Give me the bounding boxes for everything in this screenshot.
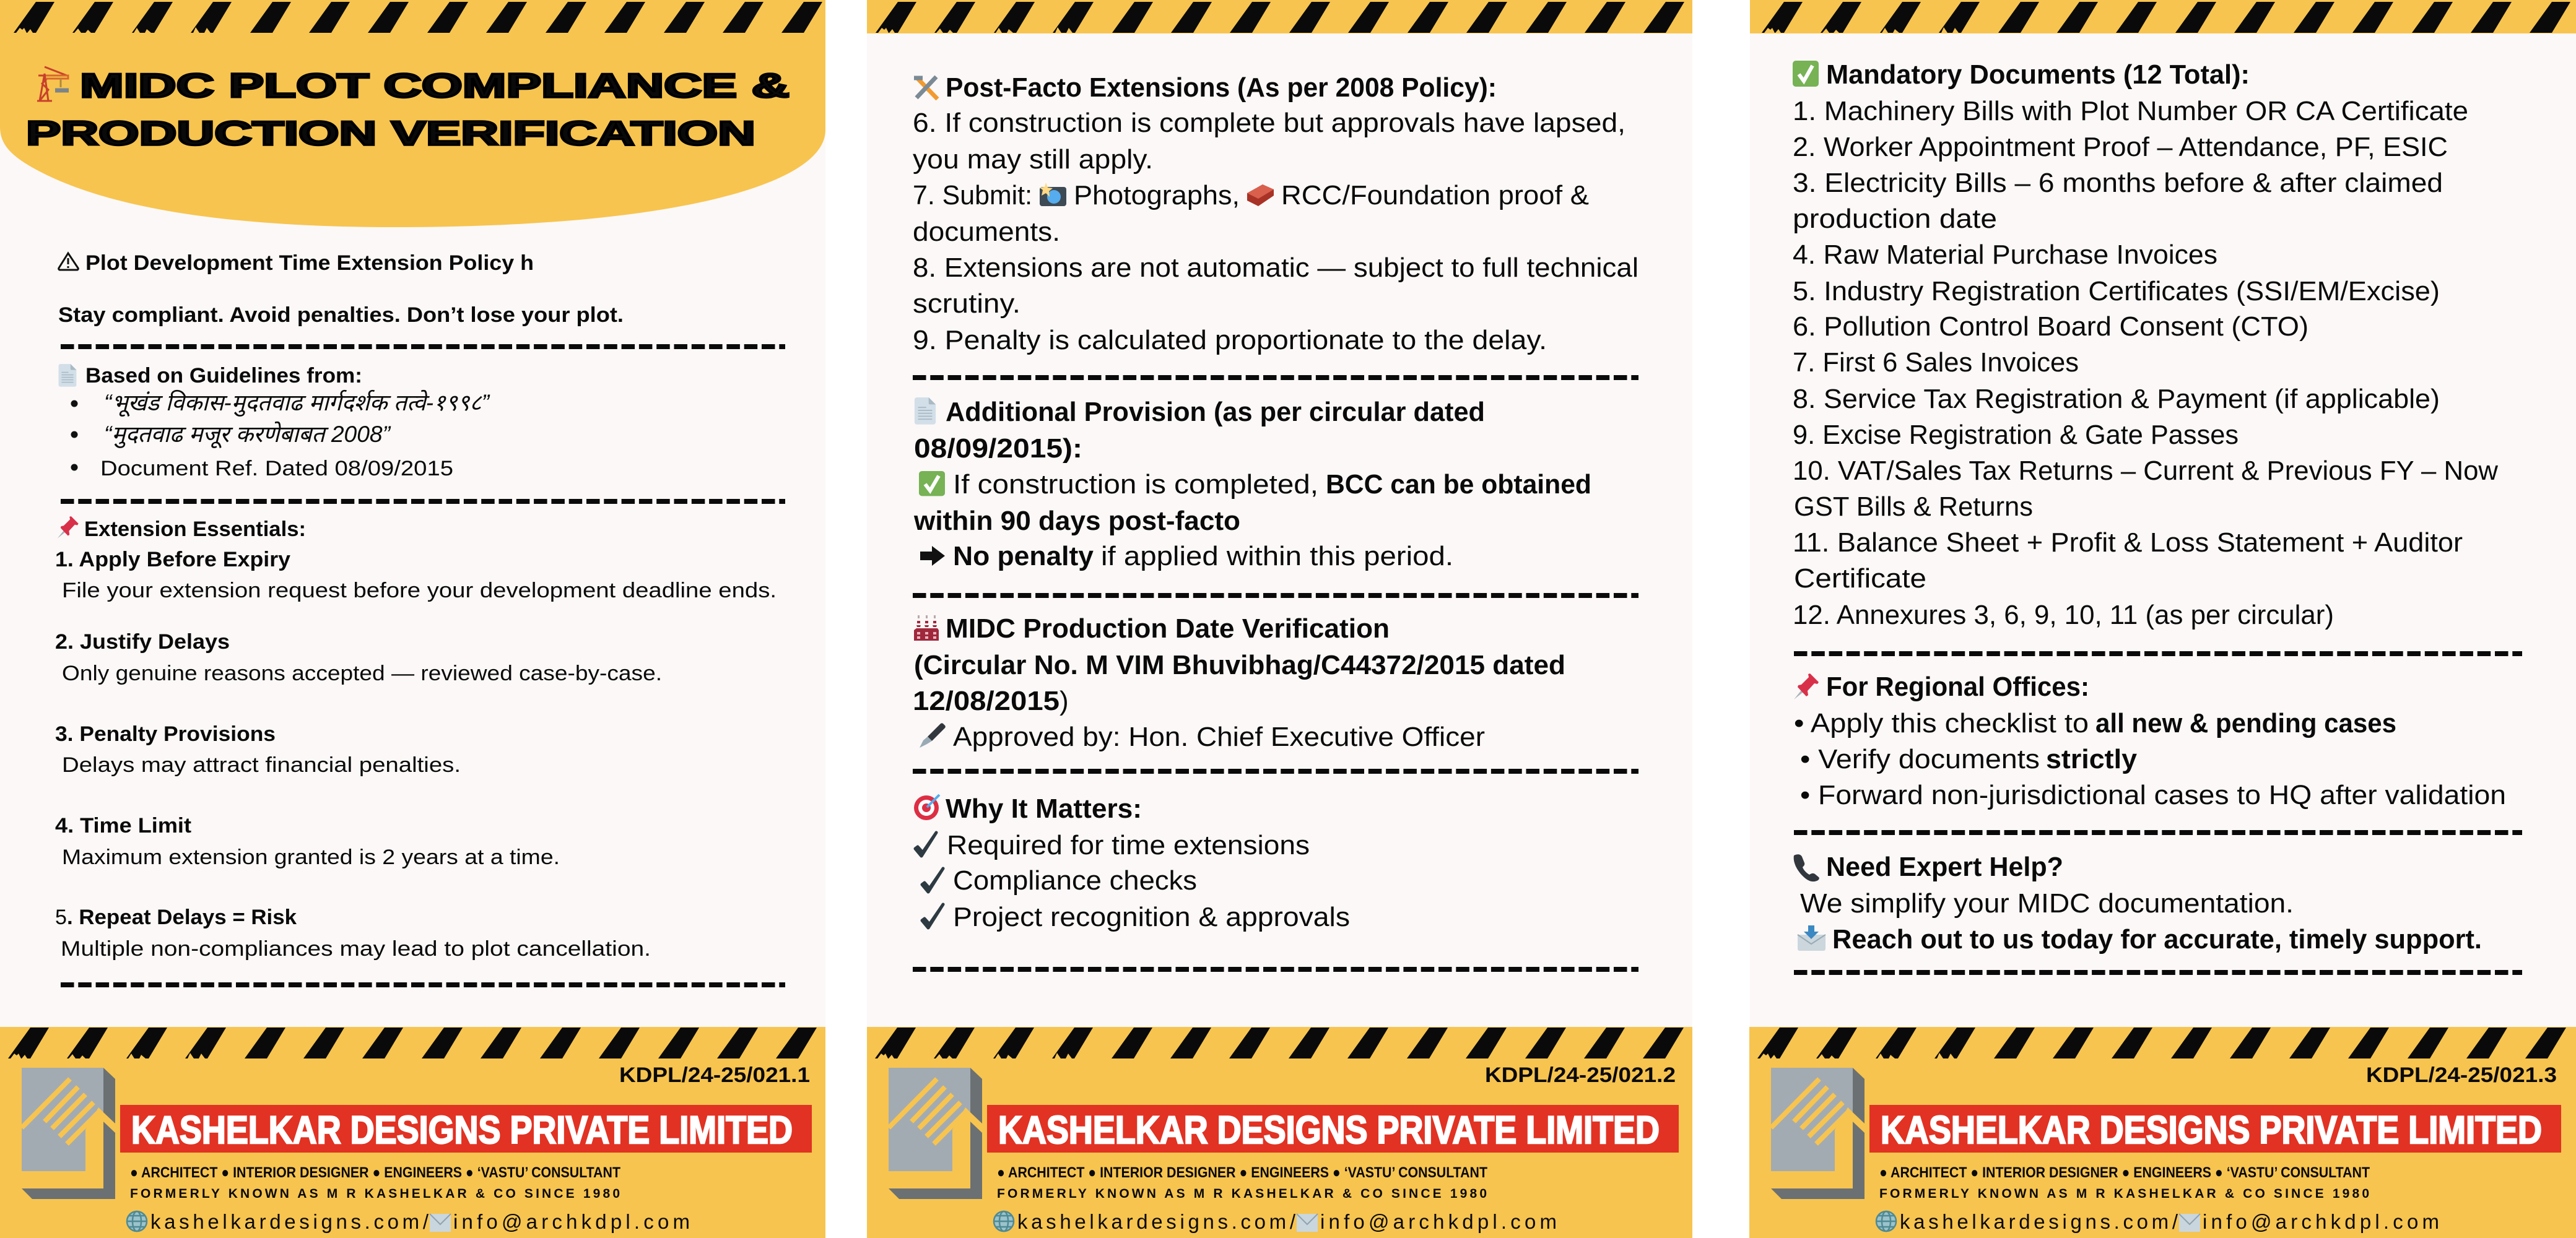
- section: regional offices: all new & pending cases: [2095, 708, 2396, 738]
- section: extension essentials: 4. Time Limit: [55, 814, 191, 838]
- panel: post-facto, provision, verification: [867, 0, 1692, 1052]
- section: production date verification: Approved by: Hon. Chief Executive Officer: [953, 722, 1485, 752]
- section: extension essentials: Multiple non-compliances may lead to plot cancellation.: [61, 937, 651, 961]
- email: info@archkdpl.com: [2203, 1210, 2439, 1233]
- icon: fountain pen: [920, 723, 946, 748]
- section: post-facto extensions: 6. If construction is complete but approvals have lapsed,: [913, 108, 1625, 138]
- section: mandatory documents list: 9. Excise Registration & Gate Passes: [1793, 420, 2239, 450]
- intro tagline: Stay compliant. Avoid penalties. Don’t lose your plot.: [58, 303, 624, 327]
- section: extension essentials: Delays may attract financial penalties.: [62, 753, 461, 777]
- reference code: KDPL/24-25/021.1: [619, 1063, 810, 1087]
- section: mandatory documents list: 11. Balance Sheet + Profit & Loss Statement + Auditor: [1793, 527, 2463, 558]
- section: mandatory documents list: 10. VAT/Sales Tax Returns – Current & Previous FY – Now: [1793, 456, 2498, 486]
- section: extension essentials: Extension Essentials:: [84, 517, 306, 541]
- icon: globe: [127, 1211, 147, 1231]
- section: extension essentials: . Repeat Delays = Risk: [67, 906, 297, 929]
- logo: [22, 1068, 115, 1199]
- website: kashelkardesigns.com/: [1900, 1210, 2178, 1233]
- section: post-facto extensions: documents.: [913, 217, 1060, 247]
- section: post-facto extensions: scrutiny.: [913, 288, 1020, 319]
- section: why it matters: Compliance checks: [953, 865, 1197, 896]
- section: production date verification: MIDC Production Date Verification: [946, 613, 1390, 644]
- reference code: KDPL/24-25/021.2: [1485, 1063, 1676, 1087]
- section: post-facto extensions: you may still apply.: [913, 144, 1153, 175]
- section: post-facto extensions: RCC/Foundation proof &: [1281, 180, 1589, 210]
- footer: company block 3: [1749, 1027, 2576, 1238]
- section: regional offices: • Forward non-jurisdictional cases to HQ after validation: [1800, 780, 2506, 810]
- section: additional provision: 08/09/2015):: [914, 433, 1082, 464]
- company name banner: KASHELKAR DESIGNS PRIVATE LIMITED: [131, 1109, 793, 1152]
- icon: document: [59, 364, 76, 387]
- section: additional provision: BCC can be obtained: [1326, 469, 1591, 500]
- intro heading: Plot Development Time Extension Policy h: [85, 251, 534, 275]
- section: mandatory documents list: GST Bills & Returns: [1794, 491, 2033, 522]
- section: extension essentials: 2. Justify Delays: [55, 630, 230, 654]
- section: post-facto extensions: 9. Penalty is calculated proportionate to the delay.: [913, 325, 1547, 355]
- section: why it matters: Project recognition & approvals: [953, 902, 1350, 932]
- section: mandatory documents list: 12. Annexures 3, 6, 9, 10, 11 (as per circular): [1793, 600, 2334, 630]
- section: mandatory documents list: 8. Service Tax Registration & Payment (if applicable): [1793, 384, 2440, 414]
- section: mandatory documents list: Mandatory Documents (12 Total):: [1826, 59, 2250, 90]
- section: production date verification: (Circular No. M VIM Bhuvibhag/C44372/2015 dated: [914, 650, 1565, 680]
- header: yellow curved title band: [0, 0, 825, 227]
- hazard stripes: top: [14, 2, 822, 33]
- section: mandatory documents list: 5. Industry Registration Certificates (SSI/EM/Excise): [1793, 276, 2440, 306]
- section: additional provision: If construction is completed,: [953, 469, 1318, 500]
- icon: check box: [1793, 61, 1819, 87]
- section: extension essentials: Only genuine reasons accepted — reviewed case-by-case.: [62, 662, 662, 685]
- section: mandatory documents list: [1793, 59, 2498, 630]
- icon: check box: [919, 471, 945, 496]
- formerly line: FORMERLY KNOWN AS M R KASHELKAR & CO SINCE 1980: [130, 1187, 620, 1201]
- section: expert help: Reach out to us today for accurate, timely support.: [1832, 924, 2482, 954]
- section: guidelines: [59, 364, 490, 480]
- icon: globe: [1876, 1211, 1896, 1231]
- icon: envelope: [2179, 1214, 2200, 1232]
- section: mandatory documents list: 3. Electricity Bills – 6 months before & after claimed: [1793, 168, 2443, 198]
- section: regional offices: • Apply this checklist to: [1794, 708, 2089, 738]
- section: regional offices: For Regional Offices:: [1826, 672, 2089, 702]
- section: post-facto extensions: Post-Facto Extensions (As per 2008 Policy):: [946, 72, 1497, 103]
- icon: camera flash: [1040, 183, 1066, 206]
- section: additional provision: No penalty: [953, 541, 1094, 571]
- section: production date verification: ): [1060, 686, 1069, 716]
- hazard stripes band: [1750, 0, 2576, 33]
- section: extension essentials: 5: [55, 906, 67, 929]
- section: extension essentials: 1. Apply Before Expiry: [55, 548, 290, 571]
- icon: envelope: [1297, 1214, 1318, 1232]
- section: extension essentials: File your extension request before your development deadline ends.: [62, 579, 777, 602]
- reference code: KDPL/24-25/021.3: [2366, 1063, 2557, 1087]
- logo: [1771, 1068, 1865, 1199]
- icon: factory: [914, 615, 939, 641]
- section: mandatory documents list: 7. First 6 Sales Invoices: [1793, 347, 2079, 378]
- website: kashelkardesigns.com/: [150, 1210, 429, 1233]
- section: regional offices: • Verify documents: [1800, 744, 2040, 774]
- section: additional provision: Additional Provision (as per circular dated: [946, 397, 1485, 427]
- services line: ● ARCHITECT ● INTERIOR DESIGNER ● ENGINEERS ● ‘VASTU’ CONSULTANT: [130, 1164, 620, 1181]
- section: guidelines: “मुदतवाढ मजूर करणेबाबत 2008”: [104, 421, 391, 449]
- section: expert help: Need Expert Help?: [1826, 852, 2063, 882]
- hazard stripes band: [867, 0, 1692, 33]
- icon: tick: [922, 904, 943, 928]
- section: why it matters: [914, 794, 1350, 932]
- icon: crane: [37, 67, 69, 101]
- footer: company block 2: [867, 1027, 1692, 1238]
- icon: document: [915, 397, 936, 425]
- section: guidelines: Document Ref. Dated 08/09/2015: [100, 457, 453, 480]
- logo: [889, 1068, 982, 1199]
- section: why it matters: Required for time extensions: [947, 830, 1310, 860]
- section: expert help: [1794, 852, 2482, 954]
- section: mandatory documents list: Certificate: [1794, 563, 1926, 594]
- section: post-facto extensions: [913, 72, 1638, 355]
- section: mandatory documents list: production date: [1793, 204, 1997, 234]
- title: PRODUCTION VERIFICATION: [26, 114, 755, 152]
- icon: globe: [994, 1211, 1014, 1231]
- website: kashelkardesigns.com/: [1017, 1210, 1296, 1233]
- email: info@archkdpl.com: [453, 1210, 690, 1233]
- section: regional offices: [1794, 672, 2506, 810]
- icon: warning: [59, 253, 78, 270]
- title: [26, 66, 790, 152]
- section: guidelines: Based on Guidelines from:: [85, 364, 362, 387]
- icon: target: [914, 795, 939, 820]
- section: expert help: We simplify your MIDC documentation.: [1800, 888, 2294, 919]
- icon: tick: [915, 833, 936, 856]
- icon: arrow: [920, 546, 945, 566]
- icon: pushpin: [58, 516, 79, 539]
- section: post-facto extensions: 8. Extensions are not automatic — subject to full technical: [913, 253, 1638, 283]
- email: info@archkdpl.com: [1320, 1210, 1557, 1233]
- section: extension essentials: [55, 516, 777, 961]
- icon: envelope: [430, 1214, 451, 1232]
- section: mandatory documents list: 4. Raw Material Purchase Invoices: [1793, 240, 2217, 270]
- icon: brick: [1247, 184, 1274, 206]
- services line: ● ARCHITECT ● INTERIOR DESIGNER ● ENGINEERS ● ‘VASTU’ CONSULTANT: [1879, 1164, 2370, 1181]
- section: why it matters: Why It Matters:: [946, 794, 1142, 824]
- section: production date verification: [913, 613, 1565, 752]
- section: mandatory documents list: 6. Pollution Control Board Consent (CTO): [1793, 311, 2308, 342]
- section: post-facto extensions: 7. Submit:: [913, 180, 1032, 210]
- section: mandatory documents list: 1. Machinery Bills with Plot Number OR CA Certificate: [1793, 96, 2468, 126]
- formerly line: FORMERLY KNOWN AS M R KASHELKAR & CO SINCE 1980: [997, 1187, 1487, 1201]
- section: additional provision: [913, 397, 1591, 571]
- icon: tick: [922, 868, 943, 892]
- section: production date verification: 12/08/2015: [913, 686, 1060, 716]
- icon: inbox envelope: [1798, 925, 1825, 951]
- icon: pushpin: [1794, 673, 1819, 699]
- title: MIDC PLOT COMPLIANCE &: [80, 66, 790, 105]
- section: extension essentials: Maximum extension granted is 2 years at a time.: [62, 846, 560, 869]
- section: additional provision: within 90 days post-facto: [913, 506, 1240, 536]
- section: mandatory documents list: 2. Worker Appointment Proof – Attendance, PF, ESIC: [1793, 132, 2448, 162]
- section: additional provision: if applied within this period.: [1101, 541, 1453, 571]
- panel: plot extension policy: [0, 0, 825, 1052]
- section: guidelines: “भूखंड विकास-मुदतवाढ मार्गदर्शक तत्वे-१९९८”: [104, 389, 490, 417]
- section: post-facto extensions: Photographs,: [1074, 180, 1240, 210]
- section: regional offices: strictly: [2046, 744, 2138, 774]
- icon: tools: [914, 77, 938, 99]
- section: extension essentials: 3. Penalty Provisions: [55, 722, 276, 746]
- panel: mandatory documents: [1750, 0, 2576, 1052]
- icon: telephone: [1794, 854, 1819, 881]
- services line: ● ARCHITECT ● INTERIOR DESIGNER ● ENGINEERS ● ‘VASTU’ CONSULTANT: [997, 1164, 1487, 1181]
- formerly line: FORMERLY KNOWN AS M R KASHELKAR & CO SINCE 1980: [1879, 1187, 2369, 1201]
- company name banner: KASHELKAR DESIGNS PRIVATE LIMITED: [998, 1109, 1660, 1152]
- footer: company block 1: [0, 1027, 825, 1238]
